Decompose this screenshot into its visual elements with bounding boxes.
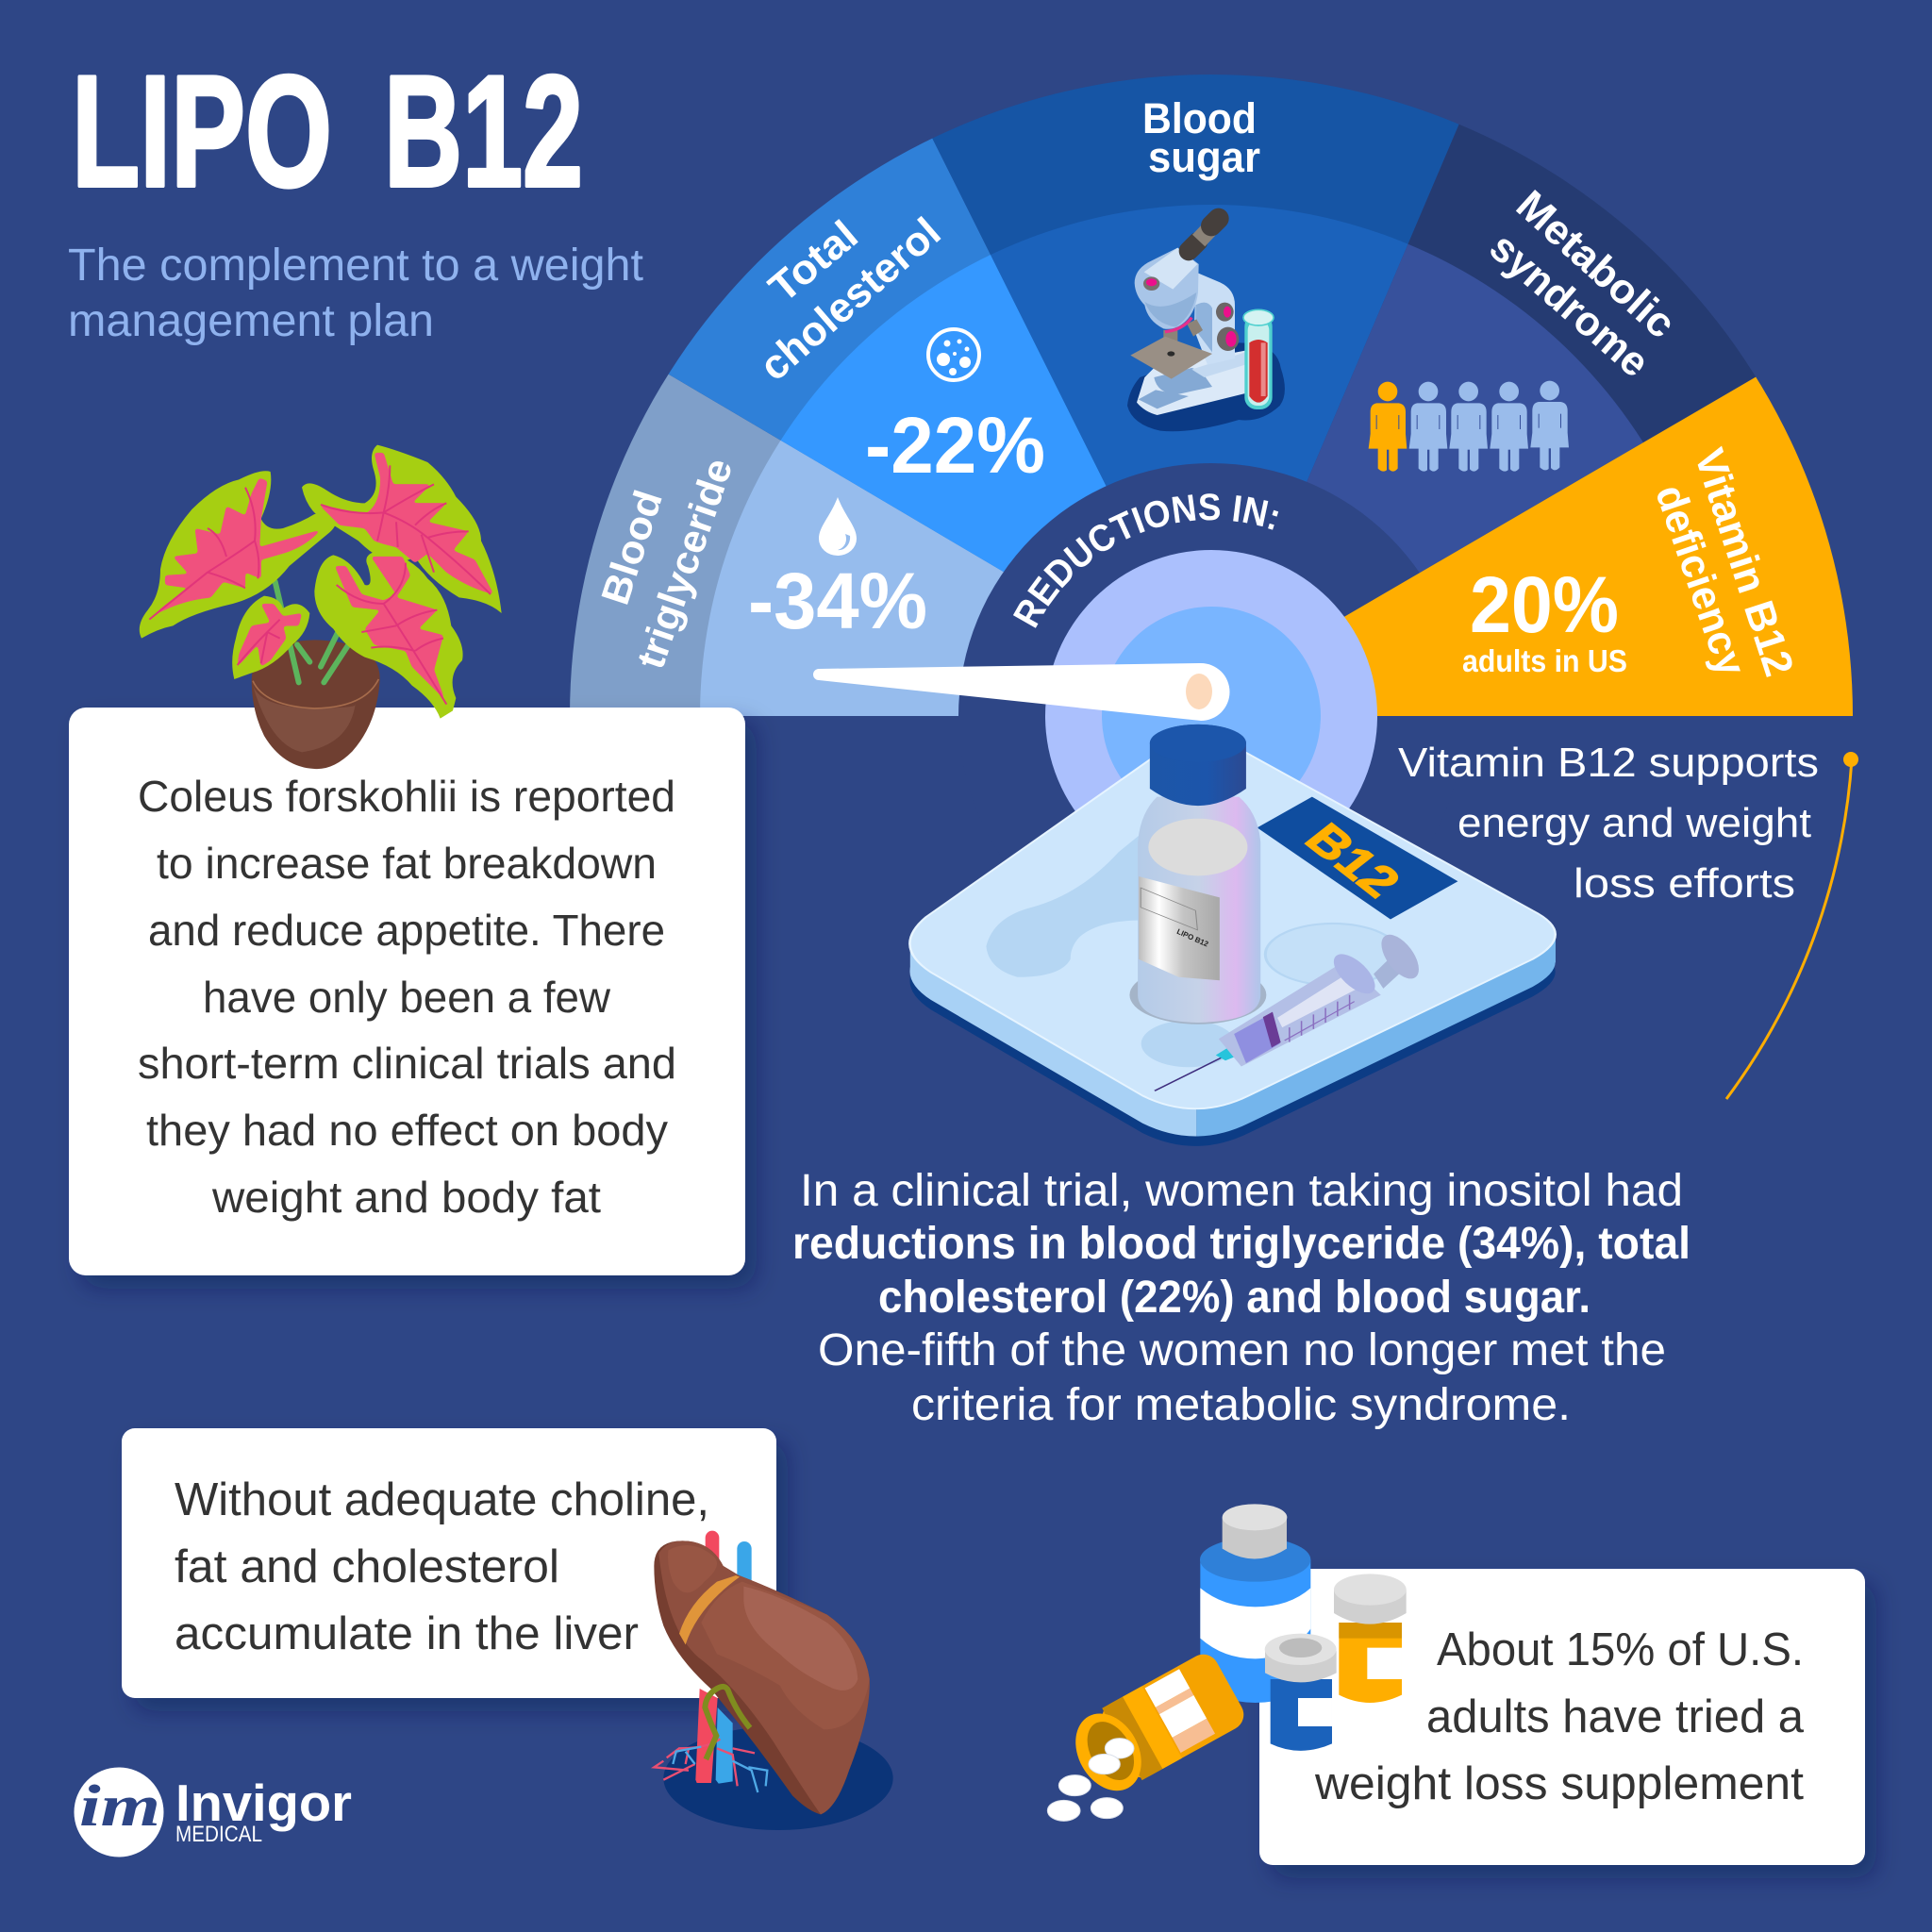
panel: choline bbox=[122, 1428, 776, 1698]
bold findings: cholesterol (22%) and blood sugar. bbox=[878, 1273, 1591, 1323]
icon: pill bottles bbox=[1047, 1504, 1407, 1821]
callout: vitamin B12: energy and weight bbox=[1457, 800, 1811, 846]
clinical trial paragraph: One-fifth of the women no longer met the bbox=[818, 1325, 1666, 1375]
choline text: Without adequate choline, bbox=[175, 1474, 709, 1525]
clinical trial paragraph: criteria for metabolic syndrome. bbox=[911, 1380, 1571, 1430]
tipped orange bottle bbox=[1062, 1649, 1249, 1803]
panel: coleus forskohlii bbox=[69, 708, 745, 1275]
coleus text: they had no effect on body bbox=[146, 1106, 668, 1155]
coleus text: and reduce appetite. There bbox=[148, 906, 665, 955]
icon: droplet bbox=[819, 497, 857, 556]
B12 plate label: B12 bbox=[1294, 814, 1411, 906]
value -34%: -34% bbox=[748, 557, 927, 645]
syringe bbox=[1155, 931, 1426, 1091]
icon: petri dish bbox=[928, 329, 979, 380]
small blue bottle bbox=[1265, 1634, 1337, 1751]
value caption: adults in US bbox=[1462, 643, 1627, 678]
bold findings: reductions in blood triglyceride (34%), total bbox=[792, 1219, 1690, 1269]
supplement text bbox=[1314, 1624, 1805, 1809]
clinical trial paragraph: In a clinical trial, women taking inositol had bbox=[800, 1166, 1683, 1216]
B12 display pad bbox=[1257, 797, 1457, 919]
segment label: blood triglyceride: triglyceride bbox=[627, 453, 741, 674]
title: B12 bbox=[384, 42, 583, 220]
segment label: blood sugar bbox=[1142, 94, 1260, 181]
segment label: vitamin B12 deficiency: deficiency bbox=[1646, 479, 1755, 682]
logo: Invigor Medical: im bbox=[79, 1774, 160, 1839]
subtitle: management plan bbox=[68, 296, 434, 346]
value 20%: 20% bbox=[1470, 560, 1619, 649]
supplement text: weight loss supplement bbox=[1314, 1758, 1804, 1809]
gauge needle bbox=[813, 663, 1229, 721]
hub ring bbox=[958, 463, 1464, 969]
segment label: total cholesterol: cholesterol bbox=[751, 208, 949, 390]
vial: LIPO B12 bbox=[1175, 927, 1210, 949]
small orange bottle bbox=[1334, 1574, 1407, 1703]
hub circles bbox=[1045, 550, 1377, 882]
bold findings bbox=[792, 1219, 1690, 1323]
coleus text: have only been a few bbox=[203, 973, 611, 1022]
segment label: blood triglyceride: Blood bbox=[592, 485, 671, 609]
semicircle chart: reductions bbox=[491, 75, 1853, 1008]
callout: vitamin B12: Vitamin B12 supports bbox=[1398, 740, 1819, 786]
segment label: total cholesterol: Total bbox=[760, 212, 867, 311]
value -22%: -22% bbox=[865, 401, 1045, 490]
icon: microscope and test tube bbox=[1127, 219, 1285, 431]
title: LIPO bbox=[72, 42, 332, 220]
vial bbox=[1129, 724, 1266, 1024]
subtitle bbox=[68, 241, 643, 346]
B12 plate with vial and syringe bbox=[909, 724, 1556, 1146]
icon: five women, one highlighted bbox=[1369, 381, 1569, 473]
vitamin B12 wedge bbox=[1344, 377, 1853, 716]
callout arc with dot bbox=[1726, 752, 1858, 1099]
pills bbox=[1047, 1739, 1134, 1821]
choline text: fat and cholesterol bbox=[175, 1541, 559, 1592]
logo: Invigor Medical: MEDICAL bbox=[175, 1822, 262, 1847]
callout: vitamin B12: loss efforts bbox=[1574, 860, 1795, 907]
coleus text: weight and body fat bbox=[211, 1173, 601, 1222]
supplement text: About 15% of U.S. bbox=[1437, 1624, 1804, 1675]
clinical trial paragraph bbox=[792, 1166, 1690, 1430]
segment label: vitamin B12 deficiency: Vitamin B12 bbox=[1686, 443, 1802, 682]
coleus text: Coleus forskohlii is reported bbox=[138, 772, 675, 821]
subtitle: The complement to a weight bbox=[68, 241, 643, 291]
coleus text: short-term clinical trials and bbox=[138, 1039, 676, 1088]
large blue bottle bbox=[1200, 1504, 1310, 1703]
icon: liver bbox=[654, 1538, 893, 1830]
choline text: accumulate in the liver bbox=[175, 1608, 639, 1659]
hub label: REDUCTIONS IN: bbox=[1013, 493, 1279, 628]
panel: weight loss supplement bbox=[1259, 1569, 1865, 1865]
segment label: metabolic syndrome: Metabolic bbox=[1507, 182, 1684, 347]
coleus text: to increase fat breakdown bbox=[157, 839, 657, 888]
callout: vitamin B12 bbox=[1398, 740, 1819, 907]
logo: Invigor Medical: Invigor bbox=[175, 1774, 352, 1832]
segment label: blood sugar: Blood bbox=[1142, 94, 1257, 142]
choline text bbox=[175, 1474, 709, 1659]
coleus text bbox=[138, 772, 676, 1222]
icon: potted coleus plant bbox=[140, 445, 502, 769]
logo: Invigor Medical bbox=[74, 1768, 352, 1857]
segment label: metabolic syndrome bbox=[1481, 182, 1684, 386]
segment label: metabolic syndrome: syndrome bbox=[1481, 224, 1657, 386]
segment label: blood sugar: sugar bbox=[1148, 133, 1260, 181]
supplement text: adults have tried a bbox=[1426, 1691, 1805, 1742]
